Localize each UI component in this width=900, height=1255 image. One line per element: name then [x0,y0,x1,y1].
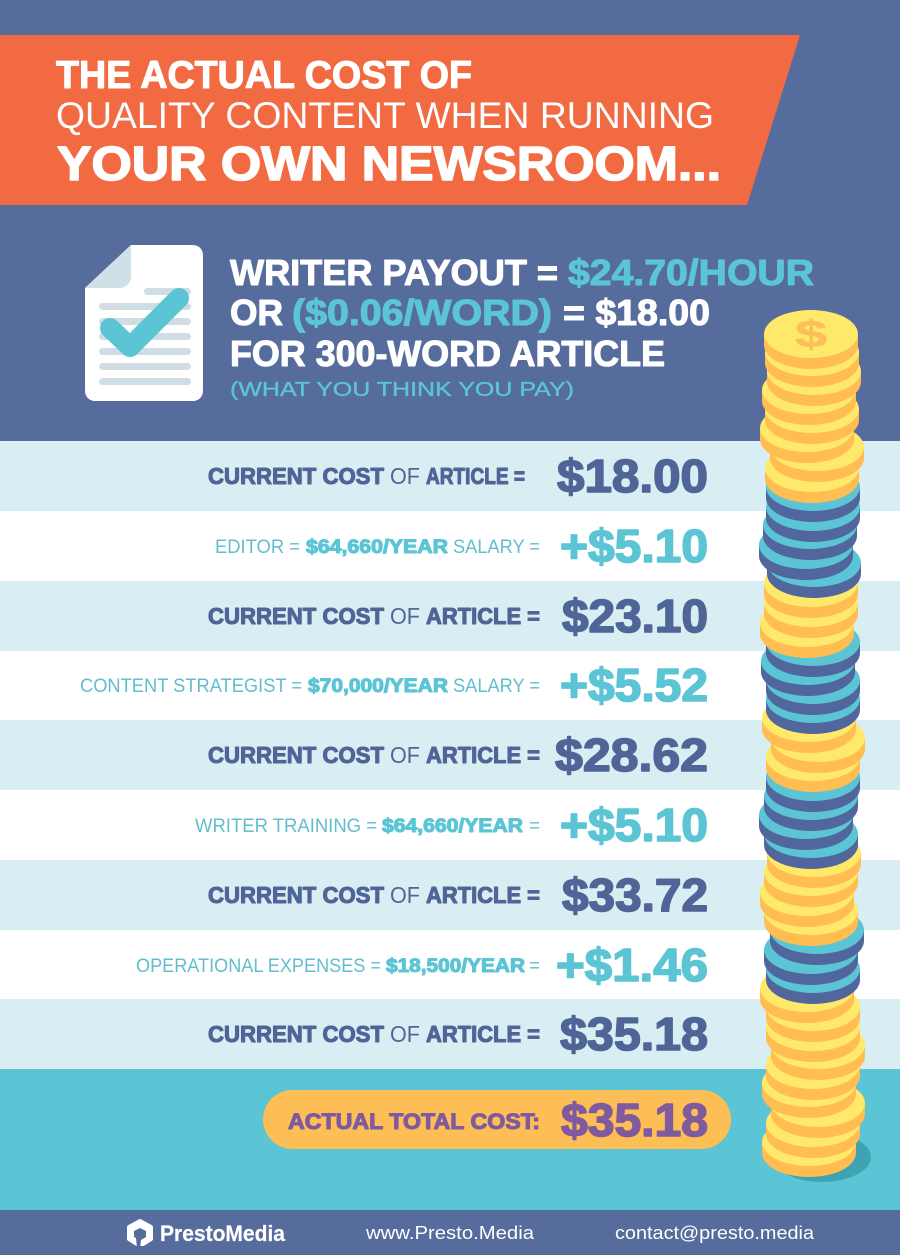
total pill: ACTUAL TOTAL COST: [288,1109,540,1134]
row 1: current cost $18.00: ARTICLE = [426,463,525,489]
row 5: current cost $28.62 [208,729,708,781]
row 8: operational expenses +$1.46: = [529,955,540,977]
row 6: writer training +$5.10: = [529,815,540,837]
row 5: current cost $28.62: OF [390,742,420,768]
payout caption: (WHAT YOU THINK YOU PAY) [230,379,574,401]
row 6: writer training +$5.10 [195,799,708,851]
website: www.Presto.Media [365,1223,535,1243]
row 9: current cost $35.18: $35.18 [560,1008,708,1060]
coin stack [759,310,871,1182]
total pill [263,1090,731,1149]
title banner [0,35,800,205]
row 2: editor +$5.10: +$5.10 [560,520,708,572]
footer [0,1210,900,1255]
row 1: current cost $18.00 [208,450,708,502]
row 4: content strategist +$5.52: CONTENT STRATEGIST = [80,675,302,697]
row 7: current cost $33.72: CURRENT COST [208,882,385,908]
row 5: current cost $28.62: $28.62 [555,729,708,781]
row 5: current cost $28.62: ARTICLE = [426,742,540,768]
title line 1: THE ACTUAL COST OF [56,54,472,97]
row 3: current cost $23.10: CURRENT COST [208,603,385,629]
row 3: current cost $23.10: OF [390,603,420,629]
row 9: current cost $35.18: CURRENT COST [208,1021,385,1047]
row 9: current cost $35.18: ARTICLE = [426,1021,540,1047]
row 3: current cost $23.10: ARTICLE = [426,603,540,629]
payout line 2: OR [230,292,283,333]
row 5: current cost $28.62: CURRENT COST [208,742,385,768]
row 6: writer training +$5.10: WRITER TRAINING = [195,815,377,837]
payout line 1: WRITER PAYOUT = [230,252,558,293]
row 3: current cost $23.10: $23.10 [562,590,708,642]
row 6: writer training +$5.10: +$5.10 [560,799,708,851]
row 8: operational expenses +$1.46 [136,939,708,991]
row 7: current cost $33.72: ARTICLE = [426,882,540,908]
cost table [0,441,900,1069]
payout line 1: $24.70/HOUR [568,252,814,293]
brand name: PrestoMedia [160,1221,286,1246]
row 7: current cost $33.72: OF [390,882,420,908]
row 8: operational expenses +$1.46: +$1.46 [556,939,708,991]
row 7: current cost $33.72 [208,869,708,921]
row 4: content strategist +$5.52: +$5.52 [560,659,708,711]
row 1: current cost $18.00: $18.00 [557,450,708,502]
coin stack: $ [795,314,827,356]
row 8: operational expenses +$1.46: OPERATIONAL EXPENSES = [136,955,381,977]
icon: presto logo [129,1221,151,1248]
row 1: current cost $18.00: CURRENT COST [208,463,385,489]
row 8: operational expenses +$1.46: $18,500/YEAR [386,955,525,977]
payout line 3: FOR 300-WORD ARTICLE [230,333,665,374]
row 4: content strategist +$5.52 [80,659,708,711]
row 2: editor +$5.10: EDITOR = [215,536,300,558]
row 9: current cost $35.18 [208,1008,708,1060]
writer payout text block [230,252,814,401]
row 2: editor +$5.10 [215,520,708,572]
row 6: writer training +$5.10: $64,660/YEAR [382,815,523,837]
payout line 1 [230,252,814,293]
icon: document with check mark [85,245,203,401]
row 9: current cost $35.18: OF [390,1021,420,1047]
contact email: contact@presto.media [615,1223,815,1243]
title line 3: YOUR OWN NEWSROOM... [57,138,721,191]
payout line 2: ($0.06/WORD) [292,292,552,333]
row 1: current cost $18.00: OF [390,463,420,489]
row 2: editor +$5.10: $64,660/YEAR [306,536,448,558]
row 3: current cost $23.10 [208,590,708,642]
payout line 2: = $18.00 [563,292,710,333]
row 4: content strategist +$5.52: $70,000/YEAR [308,675,448,697]
title line 2: QUALITY CONTENT WHEN RUNNING [56,95,714,136]
total panel [0,1069,900,1210]
row 4: content strategist +$5.52: SALARY = [453,675,540,697]
payout line 2 [230,292,710,333]
row 7: current cost $33.72: $33.72 [562,869,708,921]
total pill: $35.18 [561,1094,708,1146]
row 2: editor +$5.10: SALARY = [453,536,540,558]
